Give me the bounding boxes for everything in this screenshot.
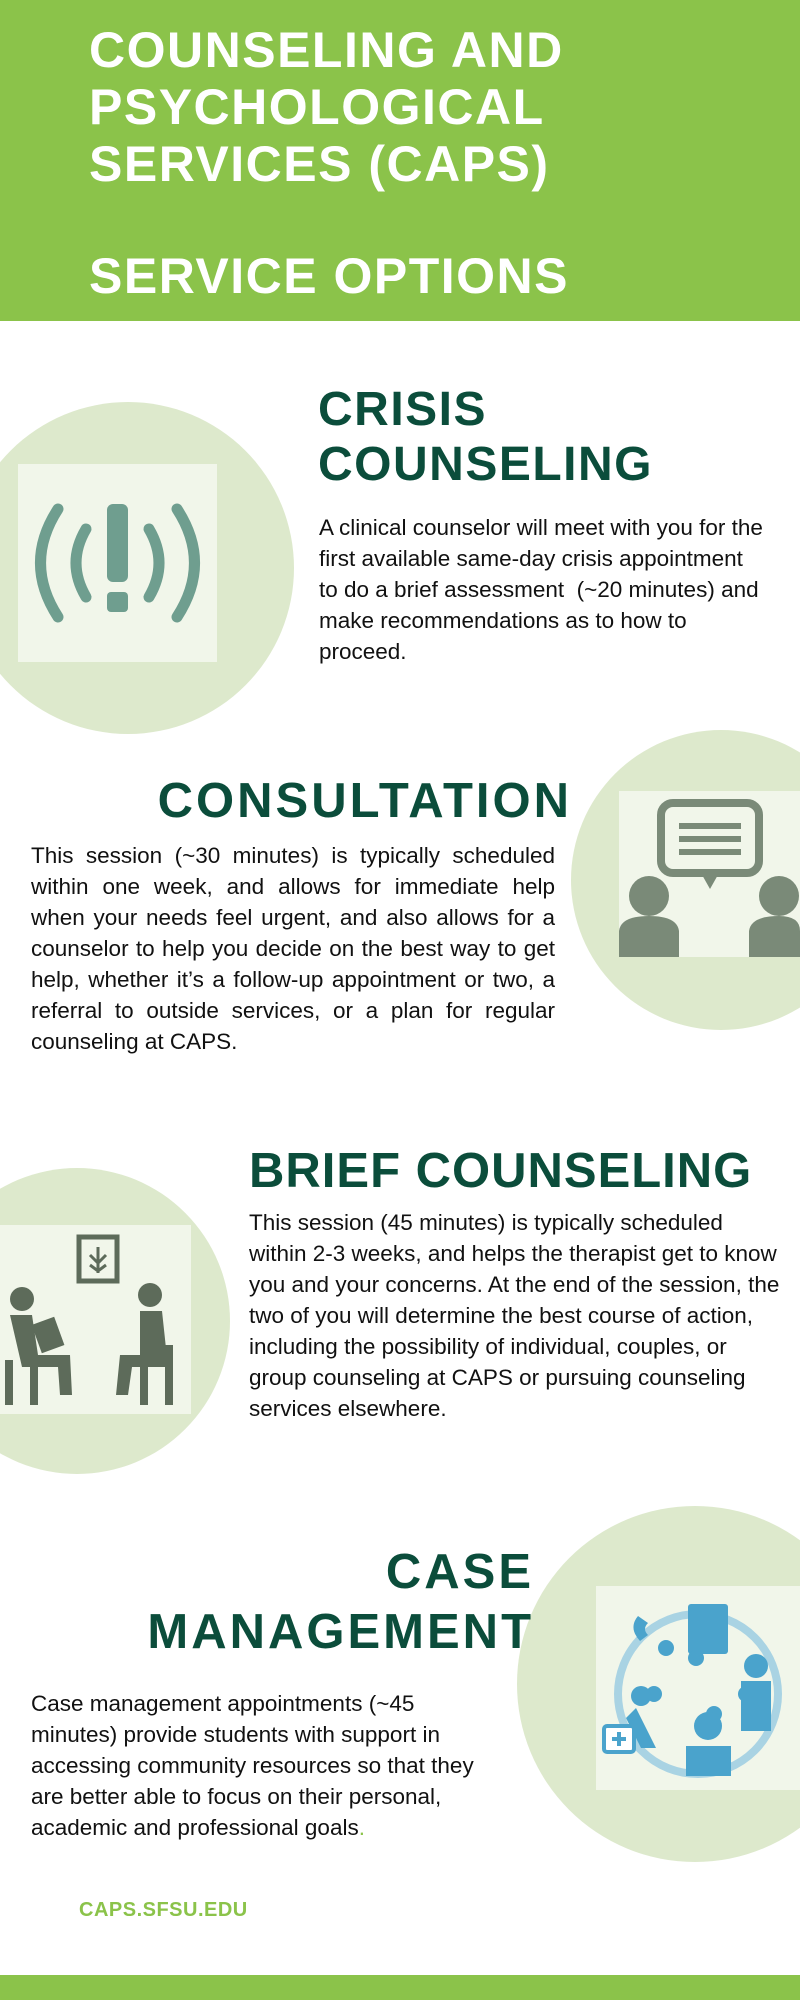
body text: A clinical counselor will meet with you for the first available same-day crisis appointment to do a brief assessment (~20 minutes) and make recommendations as to how to proceed.: [319, 515, 763, 664]
icon: therapy session: [0, 1225, 191, 1414]
panel: case management: [31, 1506, 800, 1862]
icon: chat: [619, 791, 800, 957]
heading: BRIEF COUNSELING: [249, 1144, 752, 1198]
body text: This session (45 minutes) is typically scheduled within 2-3 weeks, and helps the therapist get to know you and your concerns. At the end of the session, the two of you will determine the best course of action, including the possibility of individual, couples, or group counseling at CAPS or pursuing counseling services elsewhere.: [249, 1210, 779, 1421]
icon: care network: [596, 1586, 800, 1790]
panel: crisis counseling: [0, 383, 763, 734]
heading: CONSULTATION: [158, 774, 572, 828]
title: PSYCHOLOGICAL: [89, 79, 545, 135]
circle background: [0, 1168, 230, 1474]
heading: MANAGEMENT: [147, 1605, 534, 1659]
title: SERVICES (CAPS): [89, 136, 550, 192]
title: [89, 22, 564, 192]
panel: consultation: [31, 730, 800, 1054]
icon: alert: [18, 464, 217, 662]
heading: [147, 1545, 534, 1659]
header banner: [0, 0, 800, 321]
heading: COUNSELING: [318, 438, 653, 491]
body text: Case management appointments (~45 minutes) provide students with support in accessing community resources so that they are better able to focus on their personal, academic and professional goals.: [31, 1691, 474, 1840]
circle background: [571, 730, 800, 1030]
circle background: [517, 1506, 800, 1862]
footer link: CAPS.SFSU.EDU: [79, 1899, 248, 1921]
heading: CRISIS: [318, 383, 487, 436]
heading: [318, 383, 653, 491]
heading: CASE: [386, 1545, 534, 1599]
bottom bar: [0, 1975, 800, 2000]
title: COUNSELING AND: [89, 22, 564, 78]
panel: brief counseling: [0, 1144, 779, 1474]
body text: This session (~30 minutes) is typically scheduled within one week, and allows for immediate help when your needs feel urgent, and also allows for a counselor to help you decide on the best way to get help, whether it’s a follow-up appointment or two, a referral to outside services, or a plan for regular counseling at CAPS.: [31, 843, 555, 1054]
subtitle: SERVICE OPTIONS: [89, 248, 569, 304]
circle background: [0, 402, 294, 734]
